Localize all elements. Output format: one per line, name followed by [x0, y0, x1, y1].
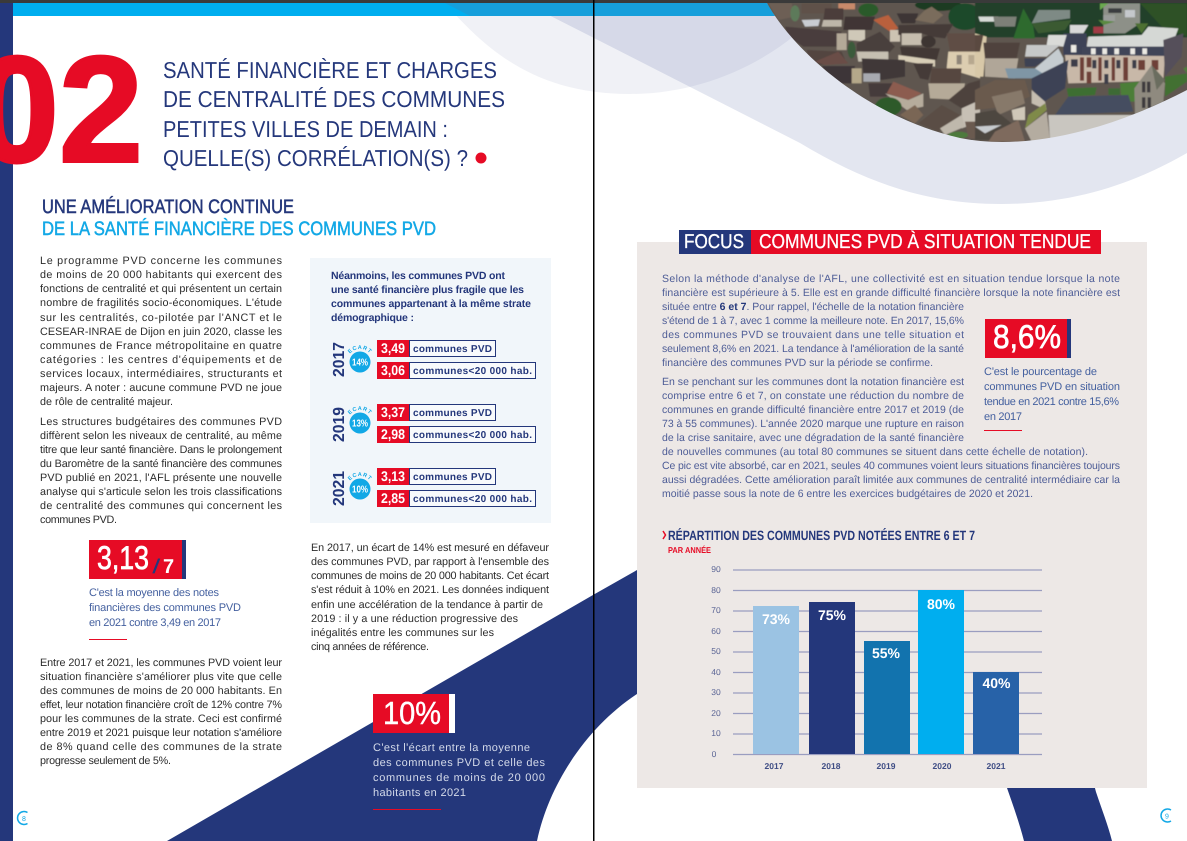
row: 2019: communes PVD — [413, 408, 492, 419]
row: 2021 — [331, 468, 536, 507]
text block: left column intro: communes PVD. — [40, 514, 117, 526]
text block: middle column: enfin une accélération de la tendance à partir de — [311, 599, 543, 611]
panel intro text: communes appartenant à la même strate — [331, 298, 531, 310]
title — [163, 57, 505, 171]
centre black fold line — [593, 0, 594, 841]
callout: 8,6%: en 2017 — [984, 411, 1022, 423]
callout: 3,13 / 7: C'est la moyenne des notes — [89, 587, 220, 599]
callout: 8,6%: tendue en 2021 contre 15,6% — [984, 396, 1119, 408]
page number 8 — [18, 812, 28, 825]
callout: 3,13 / 7 — [89, 539, 241, 640]
callout: 10% — [373, 694, 546, 810]
callout: 10%: communes de moins de 20 000 — [373, 772, 545, 784]
text block: middle column: inégalités entre les communes sur les — [311, 627, 495, 639]
text block: left column intro: titre que leur santé financière. Dans le prolongement — [40, 444, 282, 456]
text block: focus body: de nouvelles communes (au total 80 communes se situent dans cette échelle de notation). — [662, 446, 1088, 458]
panel intro text: Néanmoins, les communes PVD ont — [331, 270, 506, 282]
text block: left column conclusion: entre 2019 et 2021 puisque leur notation s'améliore — [40, 727, 282, 739]
text block: focus body — [662, 273, 1120, 500]
row: 2019: 2019 — [331, 407, 348, 442]
panel intro text: une santé financière plus fragile que les — [331, 284, 524, 296]
title: SANTÉ FINANCIÈRE ET CHARGES — [163, 57, 497, 83]
row: 2017: communes PVD — [413, 344, 492, 355]
text block: middle column: communes de moins de 20 000 habitants. Cet écart — [311, 570, 549, 582]
callout: 10%: des communes PVD et celle des — [373, 757, 546, 769]
left navy strip — [0, 3, 13, 841]
callout: 8,6% — [984, 318, 1120, 431]
page number 9: 9 — [1165, 814, 1169, 820]
text block: focus body: seulement 8,6% en 2021. La tendance à l'amélioration de la santé — [662, 343, 964, 355]
panel intro text — [331, 270, 531, 324]
title: PETITES VILLES DE DEMAIN : — [163, 116, 448, 142]
text block: left column intro: nombre de fragilités socio-économiques. L'étude — [40, 297, 282, 309]
text block: left column intro — [40, 255, 283, 526]
callout: 8,6%: communes PVD en situation — [984, 381, 1120, 393]
bar chart: 80% — [927, 596, 956, 612]
bar chart: 2020 — [933, 761, 952, 771]
row: 2021: communes PVD — [413, 472, 492, 483]
text block: middle column: des communes PVD, par rapport à l'ensemble des — [311, 556, 550, 568]
bar chart: 70 — [711, 605, 721, 615]
bar chart: 10 — [711, 728, 721, 738]
text block: focus body: s'étend de 1 à 7, avec 1 comme la meilleure note. En 2017, 15,6% — [662, 315, 964, 327]
callout: 3,13 / 7: en 2021 contre 3,49 en 2017 — [89, 617, 221, 629]
row: 2021: 2,85 — [381, 490, 405, 506]
bar chart: 2019 — [877, 761, 896, 771]
text block: focus body: aussi dégradées. Cette amélioration paraît limitée aux communes de centralité intermédiaire car la — [662, 474, 1120, 486]
text block: left column conclusion: effet, leur notation financière croît de 12% contre 7% — [40, 699, 282, 711]
callout: 3,13 / 7: financières des communes PVD — [89, 602, 241, 614]
bar chart: 55% — [872, 645, 901, 661]
row: 2021: 3,13 — [381, 468, 405, 484]
callout: 3,13 / 7: 7 — [163, 556, 174, 578]
text block: left column intro: PVD publié en 2021, l'AFL présente une nouvelle — [40, 472, 282, 484]
title: DE CENTRALITÉ DES COMMUNES — [163, 86, 505, 112]
focus heading banner — [679, 230, 1101, 254]
bar chart: 80 — [711, 585, 721, 595]
text block: focus body: financière des communes PVD sur la période se confirme. — [662, 357, 933, 369]
text block: focus body: située entre 6 et 7. Pour rappel, l'échelle de la notation financière — [662, 301, 964, 313]
callout: 10%: 10% — [383, 695, 441, 731]
text block: focus body: financière est supérieure à 5. Elle est en grande difficulté financière lorsque la note financière est — [662, 287, 1120, 299]
text block: left column conclusion: pour les communes de la strate. Ceci est confirmé — [40, 713, 282, 725]
text block: left column conclusion: situation financière s'améliorer plus vite que celle — [40, 671, 282, 683]
callout: 8,6%: 8,6% — [993, 318, 1061, 355]
text block: left column conclusion: des communes de moins de 20 000 habitants. En — [40, 685, 282, 697]
text block: left column conclusion: de 8% quand celle des communes de la strate — [40, 741, 282, 753]
text block: focus body: moitié passe sous la note de 6 entre les exercices budgétaires de 2020 et 2021. — [662, 488, 1033, 500]
row: 2017 — [331, 340, 536, 379]
focus heading banner: COMMUNES PVD À SITUATION TENDUE — [759, 230, 1091, 253]
text block: left column intro: du Baromètre de la santé financière des communes — [40, 458, 283, 470]
row: 2019: 2,98 — [381, 426, 405, 442]
row: 2019: ECART — [348, 406, 372, 414]
subheading: UNE AMÉLIORATION CONTINUE — [42, 196, 294, 218]
photo: aerial view of town — [760, 0, 1187, 150]
bar chart — [711, 564, 1042, 771]
text block: middle column: s'est réduit à 10% en 2021. Les données indiquent — [311, 584, 549, 596]
row: 2017: 3,49 — [381, 340, 405, 356]
text block: focus body: 73 à 55 communes). L'année 2020 marque une rupture en raison — [662, 418, 964, 430]
text block: focus body: communes en grande difficulté financière entre 2017 et 2019 (de — [662, 404, 964, 416]
row: 2019: communes<20 000 hab. — [413, 430, 532, 441]
text block: left column intro: de moins de 20 000 habitants qui exercent des — [40, 269, 283, 281]
chart heading — [663, 528, 975, 555]
text block: middle column — [311, 542, 550, 653]
text block: left column intro: majeurs. A noter : aucune commune PVD ne joue — [40, 382, 282, 394]
text block: middle column: En 2017, un écart de 14% est mesuré en défaveur — [311, 542, 549, 554]
row: 2021: 10% — [352, 484, 368, 496]
text block: focus body: Ce pic est vite absorbé, car en 2021, seules 40 communes voient leurs situations financières toujours — [662, 460, 1120, 472]
row: 2019: 3,37 — [381, 404, 405, 420]
title: QUELLE(S) CORRÉLATION(S) ? — [163, 145, 468, 171]
page number 8: 8 — [22, 816, 26, 823]
subheading — [42, 196, 436, 240]
bar chart: 40% — [982, 675, 1011, 691]
row: 2021: communes<20 000 hab. — [413, 494, 532, 505]
text block: left column intro: CESEAR-INRAE de Dijon en juin 2020, classe les — [40, 326, 283, 338]
row: 2017: 2017 — [331, 342, 348, 377]
text block: left column intro: catégories : les centres d'équipements et de — [40, 354, 282, 366]
text block: left column conclusion — [40, 657, 282, 767]
bar chart: 75% — [818, 607, 847, 623]
text block: left column intro: fonctions de centralité et qui présentent un certain — [40, 283, 282, 295]
bar chart: 60 — [711, 626, 721, 636]
chart heading: PAR ANNÉE — [668, 545, 711, 555]
bar chart: 40 — [711, 667, 721, 677]
page number 9 — [1161, 809, 1171, 822]
bar chart: 2018 — [822, 761, 841, 771]
text block: focus body: comprise entre 6 et 7, on constate une réduction du nombre de — [662, 390, 964, 402]
top blue bar — [0, 0, 1187, 16]
row: 2017: 3,06 — [381, 362, 405, 378]
subheading: DE LA SANTÉ FINANCIÈRE DES COMMUNES PVD — [42, 218, 436, 240]
row: 2017: communes<20 000 hab. — [413, 366, 532, 377]
panel intro text: démographique : — [331, 312, 414, 324]
row: 2019 — [331, 404, 536, 443]
focus heading banner: FOCUS — [684, 231, 744, 253]
row: 2021: 2021 — [331, 471, 348, 506]
text block: middle column: cinq années de référence. — [311, 641, 429, 653]
beige focus panel background — [637, 242, 1147, 788]
text block: left column conclusion: Entre 2017 et 2021, les communes PVD voient leur — [40, 657, 282, 669]
text block: left column intro: de rôle de centralité majeur. — [40, 396, 173, 408]
row: 2019: 13% — [352, 418, 368, 430]
text block: left column conclusion: progresse seulement de 5%. — [40, 755, 171, 767]
text block: left column intro: sur les centralités, co-pilotée par l'ANCT et le — [40, 312, 282, 324]
callout: 3,13 / 7: 3,13 — [97, 539, 149, 576]
text block: focus body: Selon la méthode d'analyse de l'AFL, une collectivité est en situation tendue lorsque la note — [662, 273, 1120, 285]
bar chart: 90 — [711, 564, 721, 574]
text block: focus body: des communes PVD se trouvaient dans une telle situation et — [662, 329, 964, 341]
row: 2017: ECART — [348, 345, 372, 354]
text block: left column intro: Les structures budgétaires des communes PVD — [40, 416, 282, 428]
bar chart: 30 — [711, 687, 721, 697]
text block: left column intro: analyse qui s'articule selon les trois classifications — [40, 486, 283, 498]
text block: left column intro: Le programme PVD concerne les communes — [40, 255, 283, 267]
callout: 10%: habitants en 2021 — [373, 787, 466, 799]
bar chart: 2017 — [765, 761, 784, 771]
bar chart: 2021 — [987, 761, 1006, 771]
text block: left column intro: de centralité des communes qui concernent les — [40, 500, 283, 512]
callout: 8,6%: C'est le pourcentage de — [984, 366, 1097, 378]
callout: 10%: C'est l'écart entre la moyenne — [373, 742, 530, 754]
text block: left column intro: services locaux, intermédiaires, structurants et — [40, 368, 282, 380]
row: 2017: 14% — [352, 358, 368, 368]
bar chart: 20 — [711, 708, 721, 718]
text block: focus body: En se penchant sur les communes dont la notation financière est — [662, 376, 964, 388]
panel: score comparison — [310, 258, 551, 523]
bar chart: 73% — [762, 611, 791, 627]
callout: 3,13 / 7: / — [152, 556, 161, 578]
bar chart: 50 — [711, 646, 721, 656]
text block: left column intro: diffèrent selon les niveaux de centralité, au même — [40, 430, 282, 442]
row: 2021: ECART — [348, 472, 372, 480]
bar chart: 0 — [712, 749, 717, 759]
text block: middle column: 2019 : il y a une réduction progressive des — [311, 613, 519, 625]
text block: focus body: de la crise sanitaire, avec une dégradation de la santé financière — [662, 432, 964, 444]
text block: left column intro: communes de France métropolitaine en quatre — [40, 340, 282, 352]
chart heading: RÉPARTITION DES COMMUNES PVD NOTÉES ENTRE 6 ET 7 — [668, 528, 975, 543]
